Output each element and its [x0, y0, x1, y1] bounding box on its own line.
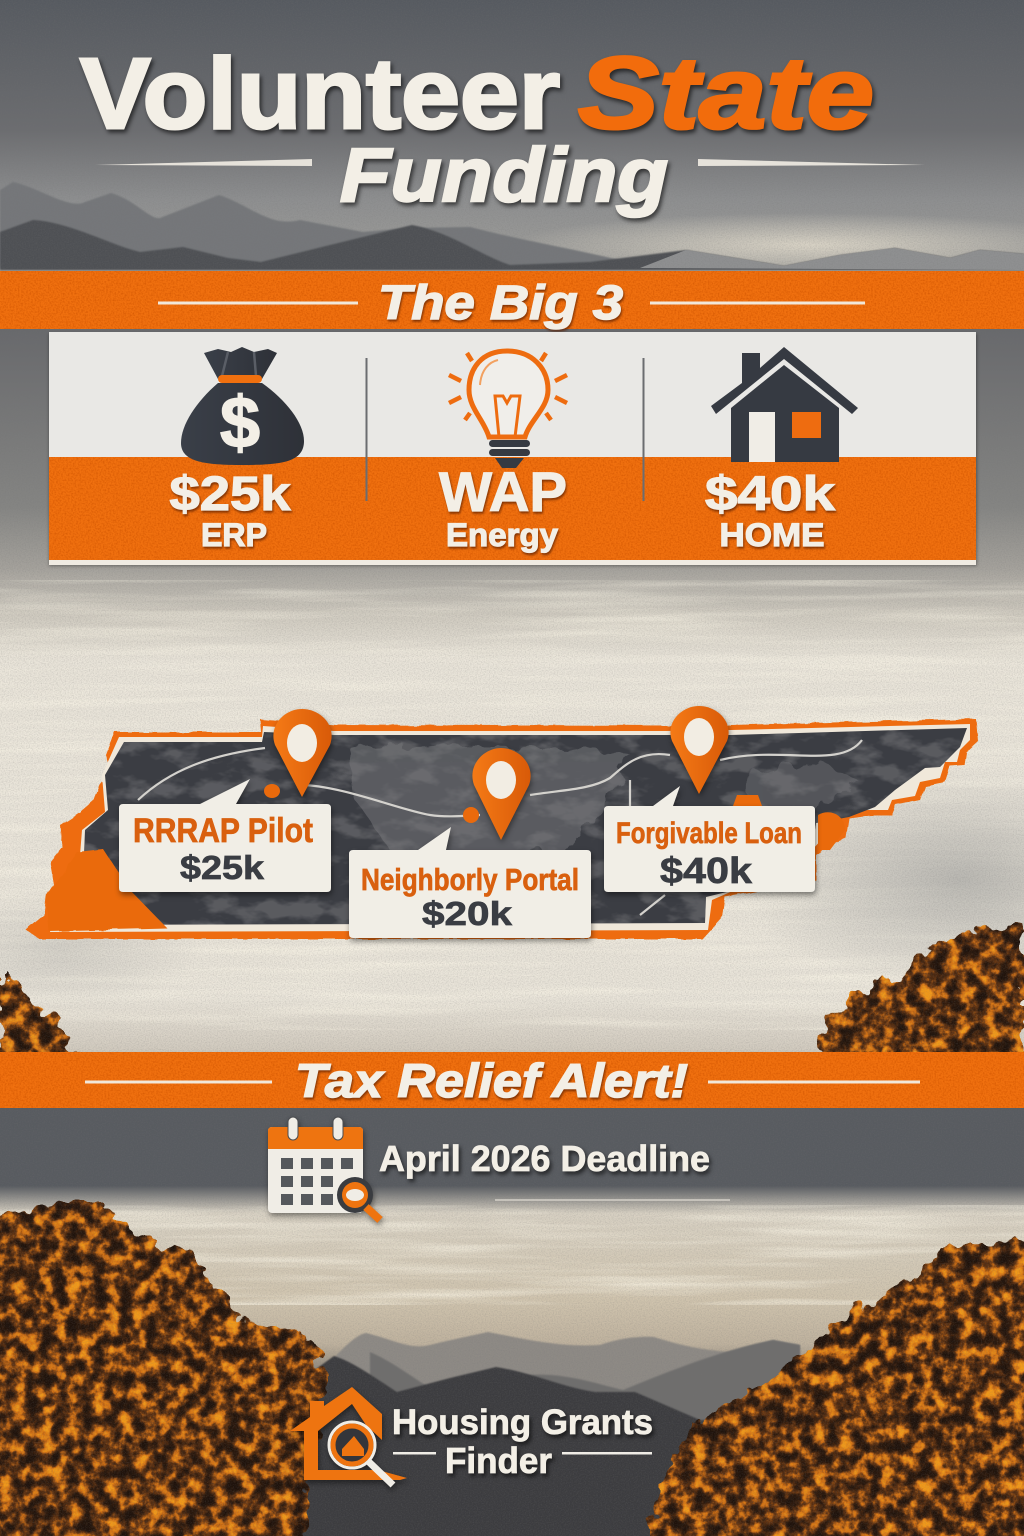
callout: RRRAP Pilot — [119, 779, 331, 892]
title — [80, 36, 925, 218]
title line: Funding: Funding — [340, 133, 668, 218]
location dot 1 — [264, 784, 280, 798]
pin 2 — [472, 748, 531, 840]
callout: Neighborly Portal — [349, 827, 591, 938]
heading: The Big 3: The Big 3 — [378, 277, 623, 330]
mountains bottom — [280, 1332, 800, 1536]
callout: RRRAP Pilot: $25k — [180, 849, 265, 886]
icon: money bag: $ — [220, 383, 260, 463]
map: Tennessee — [26, 706, 980, 940]
pin 1 — [273, 709, 332, 797]
icon: calendar with magnifier — [268, 1117, 380, 1220]
title rule left — [95, 159, 312, 166]
heading: Tax Relief Alert!: Tax Relief Alert! — [295, 1054, 688, 1107]
east orange marker — [733, 795, 762, 806]
stat: $25k ERP: ERP — [201, 517, 267, 553]
mountains top — [0, 182, 1024, 270]
title line: State: State — [578, 36, 874, 150]
logo icon: house and magnifier — [290, 1387, 407, 1485]
stat: $40k HOME: $40k — [705, 468, 835, 521]
trees: bottom right — [650, 1235, 1024, 1536]
east orange patch — [818, 812, 845, 850]
map land — [50, 728, 967, 925]
rule under deadline — [495, 1199, 730, 1201]
logo rule right — [562, 1452, 652, 1454]
map outline — [26, 719, 978, 939]
stat: WAP Energy — [439, 460, 567, 553]
band: The Big 3 — [0, 271, 1024, 330]
callout: Forgivable Loan: Forgivable Loan — [616, 817, 802, 850]
west orange region — [46, 850, 167, 931]
title line: Volunteer: Volunteer — [80, 38, 560, 150]
location dot 2 — [463, 807, 479, 823]
title rule right — [698, 159, 925, 166]
callout: Neighborly Portal: $20k — [422, 895, 513, 932]
text: April 2026 Deadline: April 2026 Deadline — [379, 1138, 710, 1179]
trees: bottom left — [0, 1205, 325, 1536]
trees: mid left — [0, 975, 75, 1060]
icon: light bulb — [449, 351, 567, 468]
stat: $25k ERP: $25k — [170, 468, 291, 521]
callout: Neighborly Portal: Neighborly Portal — [361, 862, 579, 897]
trees: mid right — [810, 925, 1024, 1060]
icon: money bag — [181, 347, 304, 465]
logo text: Housing Grants: Housing Grants — [392, 1403, 653, 1442]
stat: $40k HOME: HOME — [720, 517, 824, 553]
callout: Forgivable Loan — [604, 786, 815, 892]
band: Tax Relief Alert — [0, 1052, 1024, 1108]
stat: $40k HOME — [705, 468, 835, 553]
panel: The Big 3 — [49, 332, 977, 566]
callout: RRRAP Pilot: RRRAP Pilot — [133, 812, 313, 850]
pin 3 — [670, 706, 729, 794]
logo text: Finder: Finder — [445, 1440, 552, 1481]
icon: house — [711, 347, 858, 462]
stat: WAP Energy: Energy — [446, 517, 558, 553]
map inner border — [50, 724, 970, 932]
callout: Forgivable Loan: $40k — [660, 850, 753, 891]
stat: $25k ERP — [170, 468, 291, 553]
logo rule left — [393, 1452, 436, 1454]
stat: WAP Energy: WAP — [439, 460, 567, 523]
logo: Housing Grants Finder — [290, 1387, 653, 1485]
map terrain — [84, 730, 962, 924]
